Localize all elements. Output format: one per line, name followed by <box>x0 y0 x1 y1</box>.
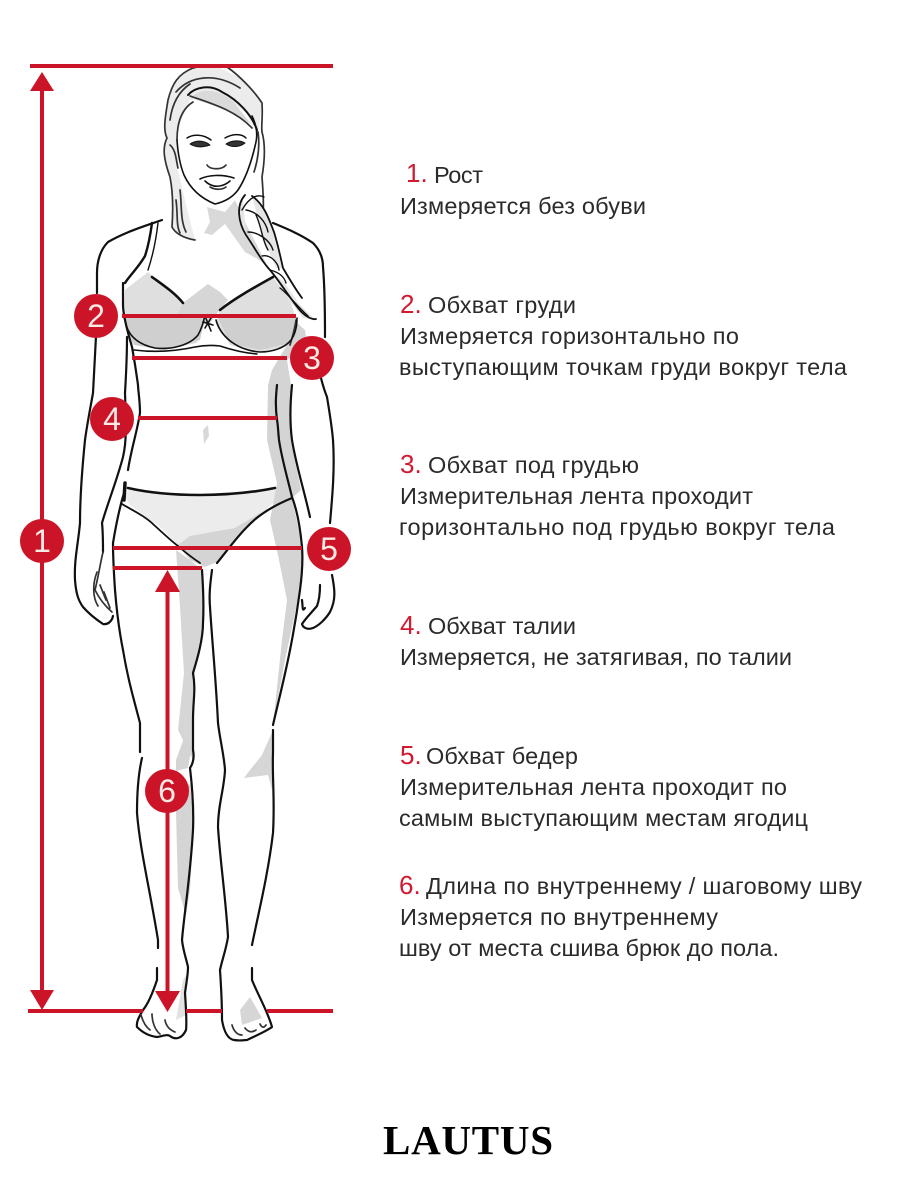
badge 4: 4 <box>103 401 121 437</box>
text block 6: inseam: шву от места сшива брюк до пола. <box>399 935 779 961</box>
text block 6: inseam: 6. <box>399 870 421 900</box>
shading: garment and body grey areas <box>123 68 307 1025</box>
measurement line: inseam top <box>113 566 202 570</box>
text block 5: hips: Обхват бедер <box>426 743 578 769</box>
body figure illustration <box>75 65 334 1040</box>
text block 2: bust: Обхват груди <box>428 292 576 318</box>
measurement line: waist <box>138 416 277 420</box>
badge 2 <box>74 294 118 338</box>
badge 5: 5 <box>320 531 338 567</box>
text block 1: height: Рост <box>434 162 483 188</box>
body outline <box>75 220 334 1040</box>
text block 1: height: 1. <box>406 158 428 188</box>
badge 6: 6 <box>158 773 176 809</box>
text block 4: waist: 4. <box>400 610 422 640</box>
text block 2: bust: 2. <box>400 289 422 319</box>
badge 3: 3 <box>303 340 321 376</box>
text block 4: waist: Измеряется, не затягивая, по талии <box>400 644 792 670</box>
height bottom line <box>28 1009 333 1013</box>
badge 3 <box>290 336 334 380</box>
text block 3: under bust: горизонтально под грудью вокруг тела <box>399 514 836 540</box>
text block 1: height: Измеряется без обуви <box>400 193 646 219</box>
badge 1: 1 <box>33 523 51 559</box>
text block 3: under bust: 3. <box>400 449 422 479</box>
hair and head <box>164 65 264 240</box>
text block 4: waist <box>400 610 792 670</box>
arrow: height <box>30 72 54 1010</box>
text block 6: inseam: Измеряется по внутреннему <box>400 904 718 930</box>
text block 3: under bust <box>399 449 836 540</box>
measurement line: bust <box>122 314 296 318</box>
face details <box>187 135 246 189</box>
text block 1: height <box>400 158 646 219</box>
text block 3: under bust: Обхват под грудью <box>428 452 639 478</box>
text block 2: bust <box>399 289 848 380</box>
badge 2: 2 <box>87 298 105 334</box>
text block 6: inseam <box>399 870 862 961</box>
measurement line: under bust <box>132 356 287 360</box>
text block 6: inseam: Длина по внутреннему / шаговому шву <box>426 873 862 899</box>
text block 3: under bust: Измерительная лента проходит <box>400 483 753 509</box>
text block 5: hips: 5. <box>400 740 422 770</box>
badge 1 <box>20 519 64 563</box>
text block 2: bust: Измеряется горизонтально по <box>400 323 739 349</box>
text block 5: hips: Измерительная лента проходит по <box>400 774 787 800</box>
badge 5 <box>307 527 351 571</box>
text block 4: waist: Обхват талии <box>428 613 576 639</box>
text block 5: hips <box>399 740 808 831</box>
arrow: inseam <box>155 570 180 1012</box>
measurement line: hips <box>113 546 302 550</box>
braid <box>239 195 316 320</box>
text block 5: hips: самым выступающим местам ягодиц <box>399 805 808 831</box>
bra <box>125 223 297 354</box>
text block 2: bust: выступающим точкам груди вокруг тела <box>399 354 848 380</box>
badge 4 <box>90 397 134 441</box>
brand name: LAUTUS <box>383 1117 553 1163</box>
height top line <box>30 64 333 68</box>
badge 6 <box>145 769 189 813</box>
briefs <box>122 483 292 563</box>
